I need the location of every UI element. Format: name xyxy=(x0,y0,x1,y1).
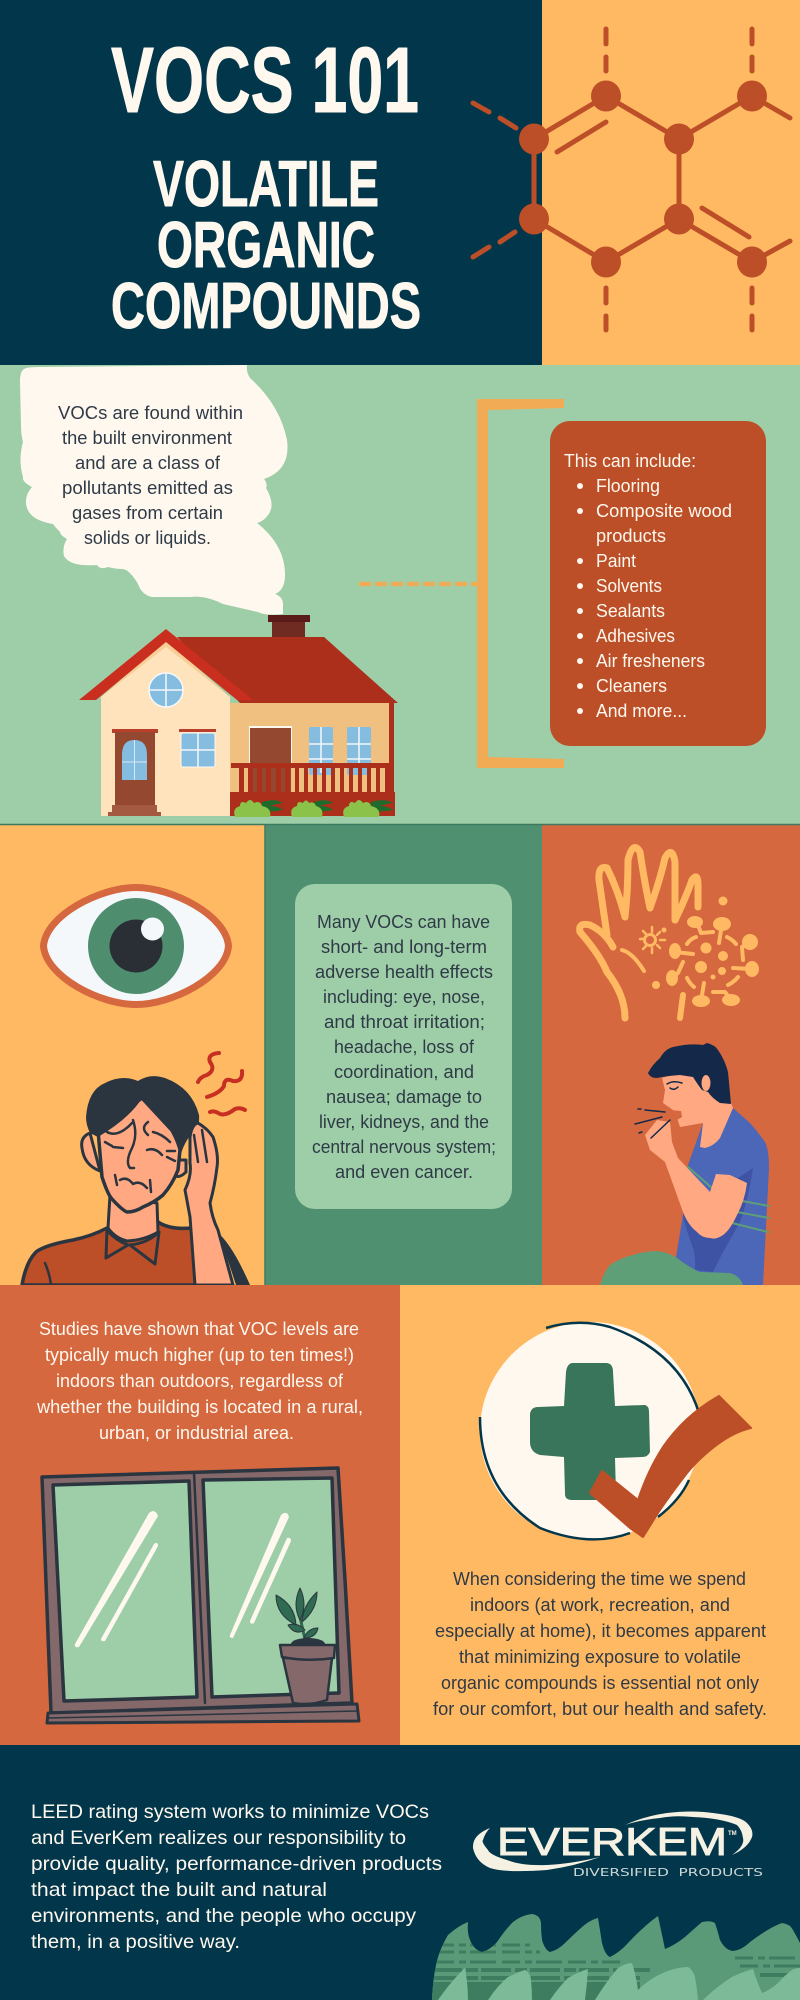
indoor text: indoors than outdoors, regardless of xyxy=(56,1370,344,1391)
footer text: LEED rating system works to minimize VOCs xyxy=(31,1801,429,1823)
safety text: especially at home), it becomes apparent xyxy=(435,1620,766,1641)
panel: footer xyxy=(31,1804,800,2000)
indoor text xyxy=(36,1318,363,1443)
list text: Solvents xyxy=(596,575,662,596)
icon: medical cross with check xyxy=(480,1322,751,1540)
title: VOCS 101 xyxy=(111,28,419,132)
dashed connector xyxy=(359,582,477,586)
indoor text: typically much higher (up to ten times!) xyxy=(45,1344,354,1365)
text box: liver, kidneys, and the xyxy=(319,1111,489,1132)
safety text: for our comfort, but our health and safety. xyxy=(433,1698,767,1719)
panel: header xyxy=(0,0,800,365)
smoke text: solids or liquids. xyxy=(84,527,211,548)
panel: skin and cough xyxy=(542,825,800,1285)
panel: eye and headache xyxy=(0,825,265,1285)
list panel xyxy=(550,421,766,746)
smoke text: pollutants emitted as xyxy=(62,477,233,498)
text box: nausea; damage to xyxy=(326,1086,482,1107)
footer text: environments, and the people who occupy xyxy=(31,1905,416,1927)
smoke text xyxy=(58,402,243,548)
list text: Sealants xyxy=(596,600,665,621)
panel: health effects xyxy=(265,825,542,1285)
list text: products xyxy=(596,525,666,546)
list text: Composite wood xyxy=(596,500,732,521)
foliage xyxy=(432,1914,800,2000)
list text: Air fresheners xyxy=(596,650,705,671)
indoor text: urban, or industrial area. xyxy=(99,1422,294,1443)
plant xyxy=(276,1588,335,1704)
text box xyxy=(295,884,512,1209)
smoke text: and are a class of xyxy=(75,452,221,473)
text box: and throat irritation; xyxy=(324,1011,485,1032)
smoke text: VOCs are found within xyxy=(58,402,243,423)
footer text: that impact the built and natural xyxy=(31,1879,327,1901)
logo: EverKem: TM xyxy=(728,1831,737,1837)
text box: adverse health effects xyxy=(315,961,493,982)
indoor text: whether the building is located in a rural, xyxy=(36,1396,363,1417)
safety text: When considering the time we spend xyxy=(453,1568,746,1589)
icon: eye xyxy=(44,888,228,1004)
text box: and even cancer. xyxy=(335,1161,473,1182)
text box: including: eye, nose, xyxy=(323,986,485,1007)
text box: headache, loss of xyxy=(334,1036,475,1057)
text box: central nervous system; xyxy=(312,1136,496,1157)
bracket xyxy=(477,399,564,768)
panel: where VOCs are found xyxy=(0,365,800,825)
safety text: organic compounds is essential not only xyxy=(441,1672,760,1693)
list text: This can include: xyxy=(564,450,696,471)
bushes xyxy=(234,800,393,817)
icon: hand with germs xyxy=(580,848,759,1018)
icon: pain squiggles xyxy=(198,1053,245,1114)
footer text xyxy=(31,1801,442,1953)
smoke text: the built environment xyxy=(62,427,232,448)
title: COMPOUNDS xyxy=(111,269,421,342)
safety text: indoors (at work, recreation, and xyxy=(470,1594,730,1615)
list text: Flooring xyxy=(596,475,660,496)
list text: Paint xyxy=(596,550,636,571)
text box: short- and long-term xyxy=(321,936,487,957)
icon: molecule xyxy=(473,29,790,330)
logo: EverKem: EVERKEM xyxy=(497,1821,727,1864)
indoor text: Studies have shown that VOC levels are xyxy=(39,1318,359,1339)
safety text xyxy=(433,1568,767,1719)
illustration: coughing man xyxy=(600,1043,769,1285)
panel: indoor levels xyxy=(0,1285,400,1745)
title xyxy=(111,28,421,342)
icon: house xyxy=(79,615,398,817)
list text: And more... xyxy=(596,700,687,721)
text box: coordination, and xyxy=(334,1061,474,1082)
green shape xyxy=(600,1251,743,1285)
illustration: man with headache xyxy=(22,1053,250,1285)
porch railing xyxy=(230,763,395,816)
footer text: provide quality, performance-driven products xyxy=(31,1853,442,1875)
title: VOLATILE xyxy=(153,147,379,220)
smoke text: gases from certain xyxy=(72,502,223,523)
smoke cloud callout xyxy=(20,365,288,615)
list text: Cleaners xyxy=(596,675,667,696)
safety text: that minimizing exposure to volatile xyxy=(459,1646,741,1667)
footer text: and EverKem realizes our responsibility to xyxy=(31,1827,406,1849)
text box: Many VOCs can have xyxy=(317,911,490,932)
panel dividers xyxy=(0,824,800,1285)
title: ORGANIC xyxy=(157,208,375,281)
illustration: window with plant xyxy=(42,1468,359,1723)
logo: EverKem: DIVERSIFIED PRODUCTS xyxy=(573,1867,763,1879)
list text: Adhesives xyxy=(596,625,675,646)
footer text: them, in a positive way. xyxy=(31,1931,240,1953)
list text xyxy=(564,450,732,721)
panel: health and safety xyxy=(400,1285,800,1745)
logo: EverKem xyxy=(473,1812,763,1879)
